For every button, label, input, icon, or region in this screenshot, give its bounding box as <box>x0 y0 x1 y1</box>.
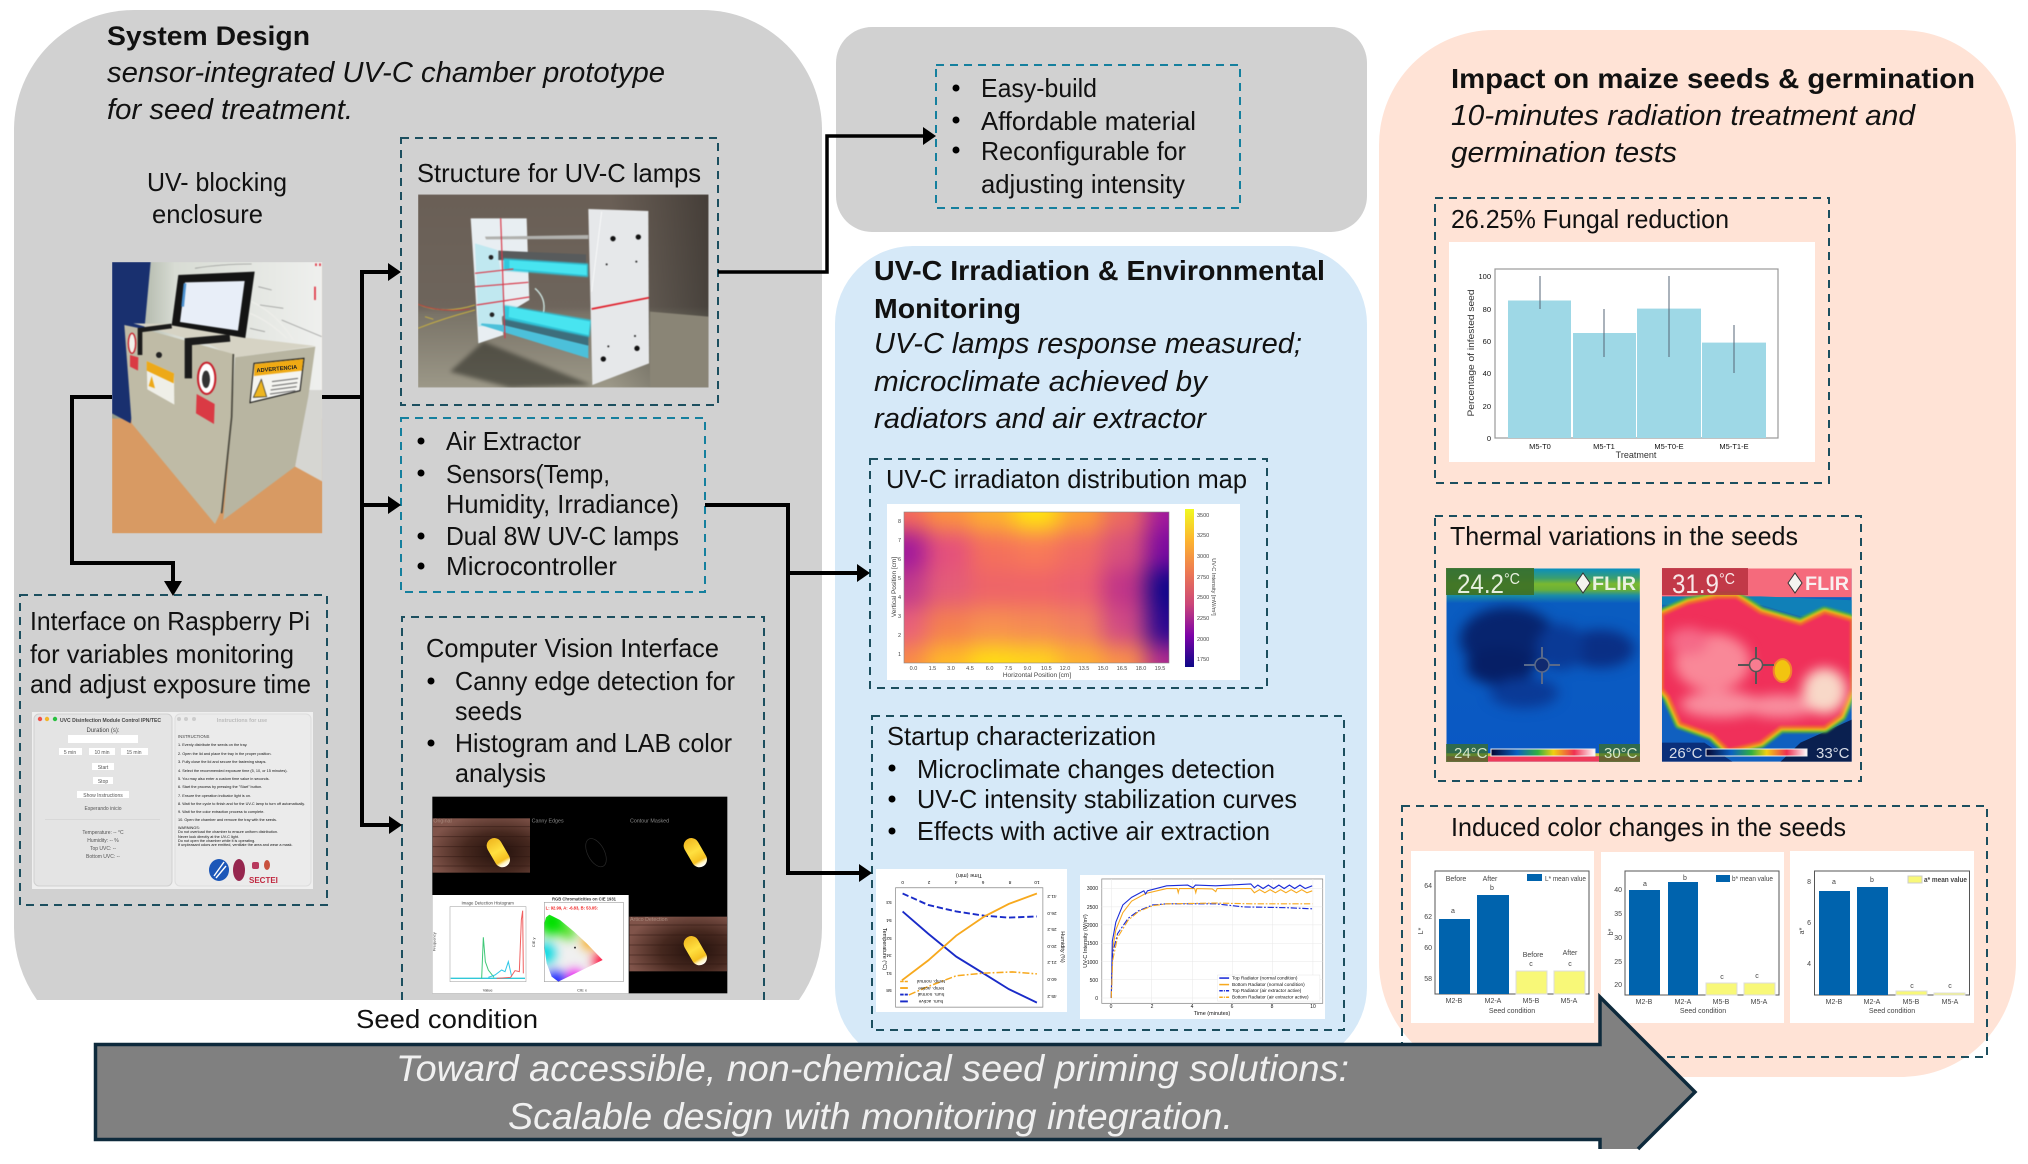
chart: L* mean value: a <box>1451 908 1455 915</box>
screenshot: control interface: INSTRUCTIONS <box>178 734 210 739</box>
chart: a* mean value: 8 <box>1807 879 1811 886</box>
image: computer vision output: L: 92.99, A: -6.83, B: 53.05: <box>546 906 598 911</box>
chart: heatmap: 4.5 <box>966 666 974 672</box>
chart: infested seed bars: 60 <box>1483 337 1491 346</box>
chart: heatmap: 3500 <box>1197 513 1209 519</box>
image: thermal after <box>1662 568 1852 762</box>
chart: heatmap: 2250 <box>1197 616 1209 622</box>
chart: a* mean value: 6 <box>1807 920 1811 927</box>
chart: a* mean value: 4 <box>1807 961 1811 968</box>
box: interface on Raspberry Pi: Interface on Raspberry Pi <box>30 606 310 636</box>
chart: b* mean value: M5-B <box>1713 999 1730 1006</box>
chart: b* mean value: 35 <box>1614 911 1622 918</box>
box: startup characterization <box>872 716 1344 1030</box>
chart: a* mean value: M2-B <box>1826 999 1843 1006</box>
screenshot: control interface: Start <box>98 765 109 771</box>
chart: a* mean value: c <box>1910 983 1914 990</box>
screenshot: control interface <box>32 712 313 889</box>
image: thermal after: 33°C <box>1816 745 1850 762</box>
subtitle: chamber prototype: for seed treatment. <box>107 94 353 126</box>
chart: L* mean value <box>1411 851 1594 1023</box>
label: UV-blocking enclosure: UV- blocking <box>147 167 287 197</box>
screenshot: control interface: 5. You may also enter a custom time value in seconds. <box>178 777 270 781</box>
chart: UV-C stabilization curves: Time (minutes) <box>1194 1011 1230 1017</box>
box: interface on Raspberry Pi: and adjust exposure time <box>30 669 311 699</box>
box: computer vision interface: Histogram and LAB color <box>455 728 732 758</box>
image: computer vision output: Artico Detection <box>630 917 668 923</box>
subtitle: lamps response <box>874 328 1302 435</box>
subtitle: radiation treatment <box>1451 100 1916 169</box>
chart: UV-C stabilization curves <box>1080 875 1325 1019</box>
chart: microclimate curves: 58 <box>886 987 892 993</box>
chart: a* mean value: a* <box>1799 927 1806 934</box>
label: UV-blocking enclosure <box>147 167 287 229</box>
chart: L* mean value: Seed condition <box>1489 1008 1535 1015</box>
chart: L* mean value: b <box>1490 885 1494 892</box>
panel: UV-C irradiation and environmental monitoring <box>835 246 1367 1065</box>
chart: UV-C stabilization curves: 2000 <box>1087 923 1098 929</box>
chart: microclimate curves: 34 <box>886 952 892 958</box>
chart: heatmap: 5 <box>898 576 901 582</box>
image: computer vision output: Value <box>483 988 493 993</box>
chart: microclimate curves: 60.0 <box>1047 976 1057 982</box>
chart: L* mean value: After <box>1483 876 1498 883</box>
chart: heatmap: 13.5 <box>1079 666 1089 672</box>
chart: microclimate curves: hum. normal <box>918 991 944 997</box>
panel: system design <box>14 10 822 1000</box>
image: thermal after: 26°C <box>1669 745 1703 762</box>
box: computer vision interface: Computer Vision Interface <box>426 633 719 663</box>
chart: microclimate curves: 53 <box>886 899 892 905</box>
chart: heatmap: 6.0 <box>986 666 993 672</box>
chart: infested seed bars <box>1449 242 1815 462</box>
chart: microclimate curves: 25.2 <box>1047 926 1057 932</box>
chart: L* mean value: c <box>1529 961 1533 968</box>
screenshot: control interface: Show Instructions <box>83 793 123 799</box>
box: UV-C distribution map: UV-C irradiaton distribution map <box>886 464 1247 494</box>
box: fungal reduction <box>1435 198 1829 483</box>
box: computer vision interface: analysis <box>455 758 546 788</box>
chart: UV-C stabilization curves: 1000 <box>1087 960 1098 966</box>
chart: L* mean value: Before <box>1446 876 1466 883</box>
box: UV-C distribution map <box>860 459 1267 705</box>
chart: L* mean value: M5-B <box>1523 998 1540 1005</box>
chart: infested seed bars: M5-T0-E <box>1654 442 1684 451</box>
chart: UV-C stabilization curves: Top Radiator (normal condition) <box>1232 976 1298 980</box>
image: computer vision output: RGB Chromaticities on CIE 1931 <box>552 897 617 902</box>
chart: b* mean value: M2-B <box>1636 999 1653 1006</box>
chart: L* mean value: L* <box>1418 927 1425 934</box>
chart: infested seed bars: 100 <box>1478 272 1491 281</box>
subtitle: chamber prototype <box>107 57 665 126</box>
chart: heatmap: 2 <box>898 633 901 639</box>
chart: heatmap: 10.5 <box>1041 666 1052 672</box>
box: sensors and components: Microcontroller <box>446 551 617 581</box>
chart: microclimate curves: 54 <box>886 917 892 923</box>
image: computer vision output: CIE x <box>577 987 587 992</box>
screenshot: control interface: Do not overload the chamber to ensure uniform distribution. <box>178 830 278 834</box>
chart: L* mean value: Before <box>1523 952 1543 959</box>
image: thermal after: 31.9 <box>1672 569 1725 599</box>
chart: L* mean value: 62 <box>1424 914 1432 921</box>
box: computer vision interface: seeds <box>455 696 522 726</box>
chart: a* mean value: a* mean value <box>1924 877 1967 884</box>
box: sensors and components: Air Extractor <box>446 426 581 456</box>
box: thermal variations: Thermal variations in the seeds <box>1450 521 1798 551</box>
arrow: enclosure to interface <box>72 397 182 596</box>
photo: enclosure <box>112 262 322 533</box>
screenshot: control interface: SECTEI <box>249 876 278 885</box>
chart: infested seed bars: Percentage of infested seed <box>1466 290 1476 416</box>
image: computer vision output: Image Detection Histogram <box>461 900 514 905</box>
chart: infested seed bars: 0 <box>1487 434 1491 443</box>
chart: L* mean value: M2-B <box>1446 998 1463 1005</box>
chart: microclimate curves: 10 <box>1034 879 1040 885</box>
image: thermal before: 24.2 <box>1457 569 1510 599</box>
image: computer vision output: CIE y <box>531 937 536 947</box>
screenshot: control interface: 3. Fully close the lid and secure the fastening straps. <box>178 760 266 764</box>
chart: heatmap: 3000 <box>1197 554 1209 560</box>
chart: L* mean value: After <box>1563 950 1578 957</box>
panel: build benefits: adjusting intensity <box>981 169 1185 199</box>
image: thermal after: FLIR <box>1805 574 1849 595</box>
screenshot: control interface: 10. Open the chamber and remove the tray with the seeds. <box>178 818 277 822</box>
chart: a* mean value: Seed condition <box>1869 1008 1915 1015</box>
chart: a* mean value <box>1790 851 1974 1023</box>
box: startup characterization: Startup characterization <box>887 721 1156 751</box>
chart: heatmap <box>887 504 1240 680</box>
chart: L* mean value: 64 <box>1424 883 1432 890</box>
box: computer vision interface <box>402 617 764 1000</box>
heading: irradiation monitoring <box>874 255 1325 324</box>
photo: enclosure: ADVERTENCIA <box>256 365 298 374</box>
chart: L* mean value: c <box>1568 961 1572 968</box>
screenshot: control interface: Do not open the chamber while it is operating. <box>178 839 255 843</box>
chart: b* mean value: c <box>1720 974 1724 981</box>
screenshot: control interface: 2. Open the lid and place the tray in the proper position. <box>178 752 272 756</box>
chart: L* mean value: M5-A <box>1561 998 1578 1005</box>
chart: heatmap: 8 <box>898 519 901 525</box>
box: induced color changes: Induced color changes in the seeds <box>1451 812 1846 842</box>
image: computer vision output: Canny Edges <box>532 819 564 825</box>
chart: microclimate curves: 20.0 <box>1047 943 1057 949</box>
box: interface on Raspberry Pi <box>20 595 327 905</box>
heading: impact: Impact on maize seeds & germination <box>1451 63 1975 94</box>
chart: microclimate curves: 21.2 <box>1047 959 1057 965</box>
subtitle: lamps response: radiators and air extractor <box>874 403 1207 435</box>
screenshot: control interface: If unpleasant odors are emitted, ventilate the area and wear a mask. <box>178 843 293 847</box>
box: fungal reduction: 26.25% Fungal reduction <box>1451 204 1729 234</box>
chart: UV-C stabilization curves: 0 <box>1110 1004 1113 1010</box>
chart: microclimate curves: 8 <box>1008 879 1011 885</box>
chart: UV-C stabilization curves: 6 <box>1231 1004 1234 1010</box>
image: thermal before <box>1446 568 1640 762</box>
screenshot: control interface: Humidity: -- % <box>87 838 119 844</box>
chart: b* mean value: 25 <box>1614 959 1622 966</box>
chart: UV-C stabilization curves: 2 <box>1151 1004 1154 1010</box>
subtitle: radiation treatment: germination tests <box>1451 137 1677 169</box>
chart: a* mean value: c <box>1948 983 1952 990</box>
chart: b* mean value: 30 <box>1614 935 1622 942</box>
chart: heatmap: 4 <box>898 595 901 601</box>
chart: infested seed bars: M5-T1-E <box>1719 442 1749 451</box>
chart: heatmap: Horizontal Position [cm] <box>1003 672 1071 679</box>
chart: microclimate curves: Temperature (°C) <box>881 928 887 970</box>
arrow: enclosure to structure, sensors and vision <box>322 263 402 834</box>
chart: a* mean value: M5-B <box>1903 999 1920 1006</box>
chart: heatmap: 7.5 <box>1005 666 1012 672</box>
screenshot: control interface: Duration (s): <box>86 728 120 734</box>
panel: build benefits: Easy-build <box>981 73 1097 103</box>
chart: L* mean value: L* mean value <box>1545 876 1586 883</box>
box: interface on Raspberry Pi: for variables monitoring <box>30 639 294 669</box>
chart: b* mean value: 40 <box>1614 887 1622 894</box>
chart: heatmap: 9.0 <box>1024 666 1031 672</box>
chart: microclimate curves: Humidity (%) <box>1059 931 1065 963</box>
screenshot: control interface: Esperando inicio <box>85 806 122 812</box>
chart: infested seed bars: 40 <box>1483 369 1491 378</box>
screenshot: control interface: 1. Evenly distribute the seeds on the tray. <box>178 743 247 747</box>
box: computer vision interface: Canny edge detection for <box>455 666 735 696</box>
chart: infested seed bars: M5-T0 <box>1529 442 1551 451</box>
chart: infested seed bars: M5-T1 <box>1593 442 1615 451</box>
panel: build benefits: Reconfigurable for <box>981 136 1186 166</box>
chart: a* mean value: M5-A <box>1942 999 1959 1006</box>
screenshot: control interface: 4. Select the recommended exposure time (5, 10, or 15 minutes). <box>178 769 288 773</box>
box: sensors and components <box>401 418 705 592</box>
screenshot: control interface: 6. Start the process by pressing the "Start" button. <box>178 785 262 789</box>
chart: b* mean value: b* <box>1608 928 1615 935</box>
heading: system design: System Design <box>107 21 310 51</box>
chart: UV-C stabilization curves: 3000 <box>1087 886 1098 892</box>
chart: UV-C stabilization curves: UV-C Intensity (W/m²) <box>1083 914 1089 968</box>
box: induced color changes <box>1402 806 1987 1057</box>
chart: heatmap: 6 <box>898 557 901 563</box>
screenshot: control interface: Bottom UVC: -- <box>86 854 120 860</box>
screenshot: control interface: 8. Wait for the cycle to finish and for the UV-C lamp to turn off automatically. <box>178 802 305 806</box>
chart: UV-C stabilization curves: 2500 <box>1087 905 1098 911</box>
chart: b* mean value: c <box>1755 973 1759 980</box>
heading: irradiation monitoring: Monitoring <box>874 293 1021 324</box>
chart: heatmap: 1.5 <box>929 666 936 672</box>
chart: b* mean value: 20 <box>1614 982 1622 989</box>
image: computer vision output: Frequency <box>432 932 437 951</box>
chart: b* mean value <box>1601 852 1784 1023</box>
label: seed condition: Seed condition <box>356 1004 538 1034</box>
chart: b* mean value: M5-A <box>1751 999 1768 1006</box>
banner arrow: conclusion: Scalable design with monitoring integration. <box>508 1096 1233 1137</box>
chart: microclimate curves: 2 <box>927 879 930 885</box>
chart: heatmap: 3.0 <box>947 666 955 672</box>
chart: heatmap: 12.0 <box>1060 666 1070 672</box>
chart: b* mean value: M2-A <box>1675 999 1692 1006</box>
chart: b* mean value: b* mean value <box>1732 876 1773 883</box>
screenshot: control interface: 7. Ensure the operation indicator light is on. <box>178 794 251 798</box>
chart: heatmap: 1 <box>898 652 901 658</box>
chart: heatmap: 2750 <box>1197 575 1209 581</box>
chart: UV-C stabilization curves: 10 <box>1310 1004 1316 1010</box>
chart: infested seed bars: Treatment <box>1616 450 1657 460</box>
chart: heatmap: 7 <box>898 538 901 544</box>
chart: heatmap: UV-C Intensity [mW/m²] <box>1210 558 1216 616</box>
image: computer vision output: Original <box>433 819 452 825</box>
chart: heatmap: Vertical Position [cm] <box>891 557 898 617</box>
screenshot: control interface: Temperature: -- °C <box>82 830 124 836</box>
screenshot: control interface: Top UVC: -- <box>90 846 116 852</box>
chart: L* mean value: 58 <box>1424 976 1432 983</box>
image: thermal before: FLIR <box>1592 574 1636 595</box>
chart: a* mean value: M2-A <box>1864 999 1881 1006</box>
heading: irradiation monitoring: UV-C Irradiation & Environmental <box>874 255 1325 286</box>
chart: UV-C stabilization curves: 1500 <box>1087 941 1098 947</box>
subtitle: chamber prototype: sensor-integrated UV-C chamber prototype <box>107 57 665 89</box>
label: UV-blocking enclosure: enclosure <box>152 199 263 229</box>
chart: L* mean value: M2-A <box>1485 998 1502 1005</box>
chart: microclimate curves: 26.0 <box>1047 910 1057 916</box>
chart: UV-C stabilization curves: Bottom Radiator (normal condition) <box>1232 982 1305 987</box>
chart: UV-C stabilization curves: 4 <box>1191 1004 1194 1010</box>
box: structure for UV-C lamps <box>401 138 718 405</box>
chart: heatmap: 15.0 <box>1098 666 1108 672</box>
box: thermal variations <box>1435 516 1861 781</box>
chart: a* mean value: a <box>1832 879 1836 886</box>
arrow: sensors to monitoring <box>705 505 872 882</box>
chart: infested seed bars: 80 <box>1483 305 1491 314</box>
chart: microclimate curves: 51 <box>886 970 892 976</box>
screenshot: control interface: UVC Disinfection Module Control IPN/TEC <box>60 718 161 724</box>
panel: build benefits: Affordable material <box>981 106 1196 136</box>
chart: UV-C stabilization curves: 8 <box>1271 1004 1274 1010</box>
chart: heatmap: 19.5 <box>1155 666 1165 672</box>
chart: heatmap: 2500 <box>1197 595 1209 601</box>
chart: heatmap: 16.5 <box>1117 666 1127 672</box>
screenshot: control interface: 5 min <box>64 750 76 756</box>
screenshot: control interface: 9. Wait for the color extraction process to complete. <box>178 810 264 814</box>
image: thermal before: 30°C <box>1604 745 1638 762</box>
chart: UV-C stabilization curves: Bottom Radiator (air extractor active) <box>1232 994 1309 1000</box>
box: sensors and components: Dual 8W UV-C lamps <box>446 521 679 551</box>
chart: microclimate curves: 0 <box>901 879 904 885</box>
chart: a* mean value: b <box>1870 877 1874 884</box>
chart: microclimate curves: 4 <box>954 879 957 885</box>
panel: impact on maize seeds <box>1379 30 2016 1077</box>
chart: b* mean value: a <box>1643 881 1647 888</box>
image: thermal before: 24°C <box>1454 745 1488 762</box>
chart: heatmap: 2000 <box>1197 637 1209 643</box>
chart: infested seed bars: 20 <box>1483 402 1491 411</box>
chart: microclimate curves: hum. active <box>918 998 943 1004</box>
chart: heatmap: 1750 <box>1197 657 1209 663</box>
screenshot: control interface: WARNINGS: <box>178 826 200 830</box>
chart: microclimate curves: 52 <box>886 935 892 941</box>
screenshot: control interface: 15 min <box>126 750 142 756</box>
chart: microclimate curves: 41.2 <box>1047 893 1057 899</box>
panel: build benefits <box>836 27 1367 232</box>
chart: microclimate curves: temp. active <box>918 985 944 991</box>
chart: heatmap: 3250 <box>1197 533 1209 539</box>
chart: microclimate curves: Time (min) <box>956 872 982 878</box>
caption: structure: Structure for UV-C lamps <box>417 158 701 188</box>
banner arrow: conclusion <box>96 997 1695 1149</box>
screenshot: control interface: Instructions for use <box>217 718 267 724</box>
chart: heatmap: 3 <box>898 614 901 620</box>
box: startup characterization: Microclimate changes detection <box>917 754 1275 784</box>
chart: b* mean value: Seed condition <box>1680 1008 1726 1015</box>
chart: microclimate curves: 6 <box>981 879 984 885</box>
chart: heatmap: 0.0 <box>910 666 917 672</box>
chart: UV-C stabilization curves: Top Radiator (air extractor active) <box>1232 988 1302 993</box>
subtitle: lamps response: UV-C lamps response measured; <box>874 328 1302 360</box>
chart: microclimate curves: 45.2 <box>1047 993 1057 999</box>
arrow: structure to build benefits <box>718 127 936 272</box>
screenshot: control interface: Never look directly at the UV-C light. <box>178 835 239 839</box>
image: computer vision output: Contour Masked <box>630 819 669 825</box>
chart: L* mean value: 60 <box>1424 945 1432 952</box>
subtitle: lamps response: microclimate achieved by <box>874 366 1209 398</box>
screenshot: control interface: 10 min <box>94 750 110 756</box>
box: startup characterization: UV-C intensity stabilization curves <box>917 784 1297 814</box>
image: thermal after: °C <box>1719 571 1735 588</box>
chart: b* mean value: b <box>1683 875 1687 882</box>
chart: UV-C stabilization curves: 0 <box>1095 996 1098 1002</box>
chart: heatmap: 18.0 <box>1136 666 1146 672</box>
photo: lamp structure <box>418 194 709 388</box>
banner arrow: conclusion: Toward accessible, non-chemical seed priming solutions: <box>396 1048 1349 1089</box>
chart: microclimate curves <box>876 869 1067 1012</box>
subtitle: radiation treatment: 10-minutes radiation treatment and <box>1451 100 1916 132</box>
box: sensors and components: Sensors(Temp, <box>446 459 610 489</box>
screenshot: control interface: Stop <box>98 779 108 785</box>
chart: UV-C stabilization curves: 500 <box>1090 978 1098 984</box>
image: computer vision output <box>432 797 727 993</box>
box: startup characterization: Effects with active air extraction <box>917 816 1270 846</box>
box: sensors and components: Humidity, Irradiance) <box>446 489 679 519</box>
chart: microclimate curves: temp. normal <box>917 978 945 984</box>
image: thermal before: °C <box>1504 571 1520 588</box>
